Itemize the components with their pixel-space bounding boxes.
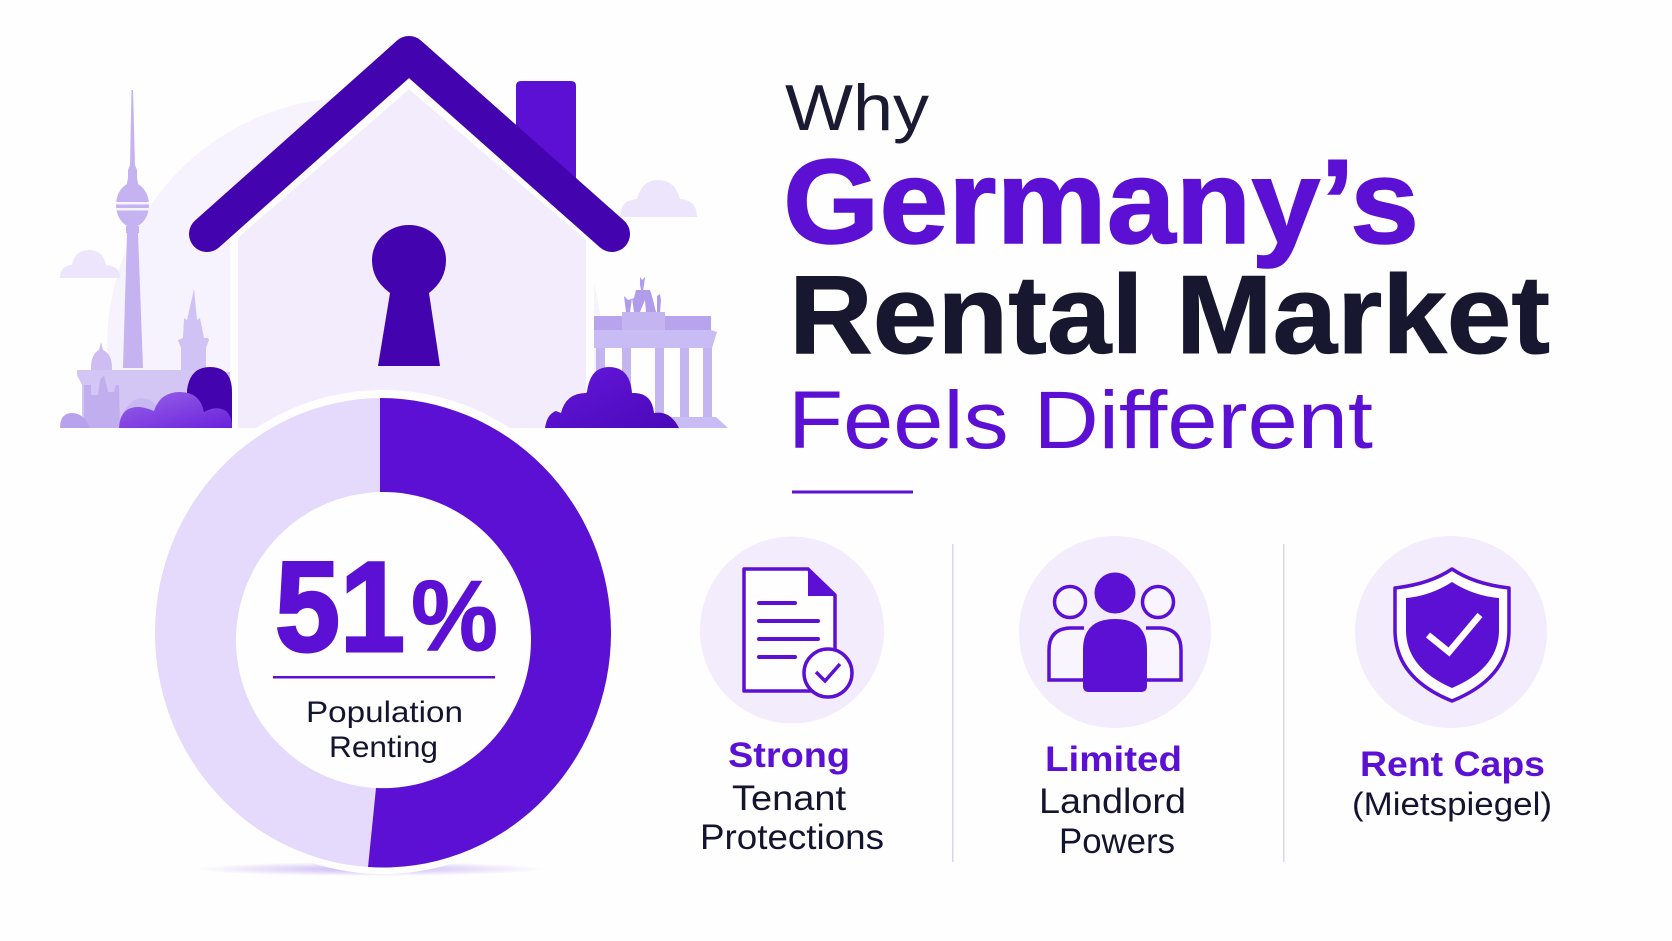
icon: document with check bbox=[744, 567, 852, 697]
icon: shield with check bbox=[1395, 569, 1509, 701]
icon: group of people bbox=[1049, 572, 1181, 692]
stat label bbox=[306, 696, 463, 764]
stat value: % bbox=[411, 560, 498, 672]
light bush bbox=[119, 392, 232, 428]
TV tower bbox=[116, 90, 149, 368]
white outline bbox=[147, 390, 619, 874]
icon background bbox=[1019, 536, 1211, 728]
donut shadow bbox=[195, 862, 545, 876]
title line: Feels Different: Feels Different bbox=[788, 375, 1373, 466]
label: (Mietspiegel) bbox=[1352, 786, 1552, 822]
label: Powers bbox=[1059, 822, 1175, 861]
title line: Why: Why bbox=[785, 71, 930, 144]
label: Rent Caps bbox=[1360, 745, 1545, 784]
label: Protections bbox=[700, 818, 884, 857]
stat label: Renting bbox=[329, 731, 438, 764]
panel: rent caps bbox=[1352, 536, 1552, 822]
icon background bbox=[1355, 536, 1547, 728]
label: Landlord bbox=[1039, 782, 1186, 821]
label: Limited bbox=[1045, 740, 1182, 779]
chimney bbox=[516, 81, 576, 195]
background circle bbox=[107, 99, 600, 373]
stat value bbox=[275, 536, 498, 679]
icon background bbox=[700, 536, 884, 724]
cloud right bbox=[620, 180, 697, 217]
label bbox=[1039, 740, 1186, 861]
dark bush bbox=[187, 367, 232, 428]
label bbox=[700, 736, 884, 857]
title underline bbox=[792, 490, 913, 494]
keyhole bbox=[372, 225, 446, 366]
house body bbox=[234, 84, 590, 440]
Brandenburg Gate bbox=[594, 277, 728, 428]
title line: Germany's: Germany’s bbox=[783, 135, 1419, 269]
stat divider bbox=[273, 676, 495, 678]
church and city buildings bbox=[60, 289, 230, 428]
roof bbox=[207, 54, 612, 234]
stat value: 51 bbox=[275, 536, 405, 679]
right bush bbox=[545, 367, 679, 428]
light segment bbox=[155, 398, 380, 867]
panel: strong tenant protections bbox=[700, 536, 884, 857]
donut chart: 51% population renting bbox=[147, 390, 619, 876]
quadriga sculpture bbox=[624, 277, 661, 312]
title bbox=[783, 71, 1550, 494]
label bbox=[1352, 745, 1552, 822]
label: Tenant bbox=[732, 779, 846, 818]
title line: Rental Market: Rental Market bbox=[789, 253, 1550, 377]
label: Strong bbox=[728, 736, 850, 775]
illustration: house with Berlin skyline bbox=[60, 54, 728, 440]
cloud left bbox=[60, 250, 120, 278]
stat label: Population bbox=[306, 696, 463, 729]
panel: limited landlord powers bbox=[1019, 536, 1211, 861]
dark segment 51% bbox=[368, 398, 611, 868]
